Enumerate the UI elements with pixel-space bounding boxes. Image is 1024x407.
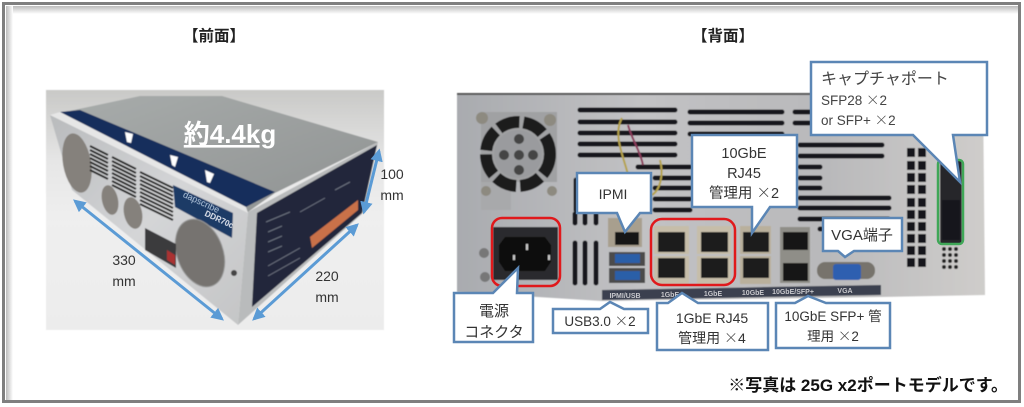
dimension: 100 mm: mm — [380, 187, 404, 203]
highlight: 1GbE ports — [651, 219, 735, 285]
dimension: 100 mm: 100 — [380, 166, 404, 182]
port labels — [609, 288, 853, 300]
heading: rear: 【背面】 — [692, 27, 754, 45]
port labels: 10GbE/SFP+ — [772, 289, 814, 296]
port labels: 10GbE — [742, 290, 764, 297]
photo: front of device — [46, 90, 404, 330]
port labels: 1GbE — [661, 292, 679, 299]
dimension: 220 mm: 220 — [315, 268, 339, 284]
heading: front: 【前面】 — [183, 26, 245, 45]
callout: 10GbE SFP+: 10GbE SFP+ 管 — [784, 309, 882, 324]
power inlet — [493, 227, 558, 280]
side grid — [907, 148, 926, 267]
IPMI port — [608, 218, 642, 247]
callout: 1GbE RJ45: 1GbE RJ45 — [676, 310, 748, 326]
callout: 10GbE SFP+: 理用 ×2 — [807, 325, 859, 345]
dimension: 330 mm: 330 — [112, 252, 136, 268]
callout: capture port: キャプチャポート — [821, 70, 949, 88]
RJ45 ports — [654, 226, 771, 284]
callout: 10GbE RJ45: 管理用 ×2 — [709, 182, 779, 203]
port labels: VGA — [837, 288, 853, 295]
callout: 10GbE RJ45: 10GbE — [721, 146, 767, 162]
footnote: ※写真は 25G x2ポートモデルです。 — [728, 375, 1008, 395]
callout: IPMI: IPMI — [599, 186, 627, 202]
callout: USB3.0: USB3.0 ×2 — [564, 310, 636, 330]
callout: USB3.0 — [553, 302, 648, 333]
callout: 10GbE RJ45 — [692, 135, 797, 233]
dimension: 330 mm: mm — [112, 273, 136, 289]
highlight: power inlet — [492, 218, 560, 286]
callout: 10GbE SFP+ — [776, 296, 890, 348]
dimension arrows — [75, 151, 379, 319]
dimension: 220 mm: mm — [315, 289, 339, 305]
callout: 10GbE RJ45: RJ45 — [727, 166, 761, 182]
port labels: 1GbE — [704, 291, 722, 298]
highlight: capture ports — [938, 160, 963, 244]
label strip — [602, 285, 881, 300]
logo: dapscribe — [181, 190, 221, 215]
capture bay — [940, 160, 962, 244]
callout: 1GbE RJ45: 管理用 ×4 — [678, 328, 746, 348]
callout: capture port: or SFP+ ×2 — [821, 109, 896, 129]
callout: power connector: 電源 — [479, 303, 509, 320]
callout: IPMI — [577, 173, 651, 232]
fan grille — [476, 112, 557, 282]
callout: power connector: コネクタ — [464, 324, 524, 341]
vent slots — [575, 110, 889, 283]
callout: VGA — [823, 218, 902, 257]
port labels: IPMI/USB — [609, 293, 641, 300]
callout: power connector — [454, 268, 533, 342]
USB ports — [609, 252, 645, 266]
SFP ports — [780, 227, 810, 283]
weight label: 約4.4kg — [184, 119, 276, 149]
callout: 1GbE RJ45 — [657, 293, 768, 350]
callout: capture port — [811, 62, 987, 182]
callout: VGA: VGA端子 — [831, 227, 893, 244]
VGA port — [817, 262, 875, 279]
callout: capture port: SFP28 ×2 — [821, 89, 887, 109]
model name: DDR70c — [203, 209, 235, 231]
photo: rear of device — [457, 93, 985, 301]
